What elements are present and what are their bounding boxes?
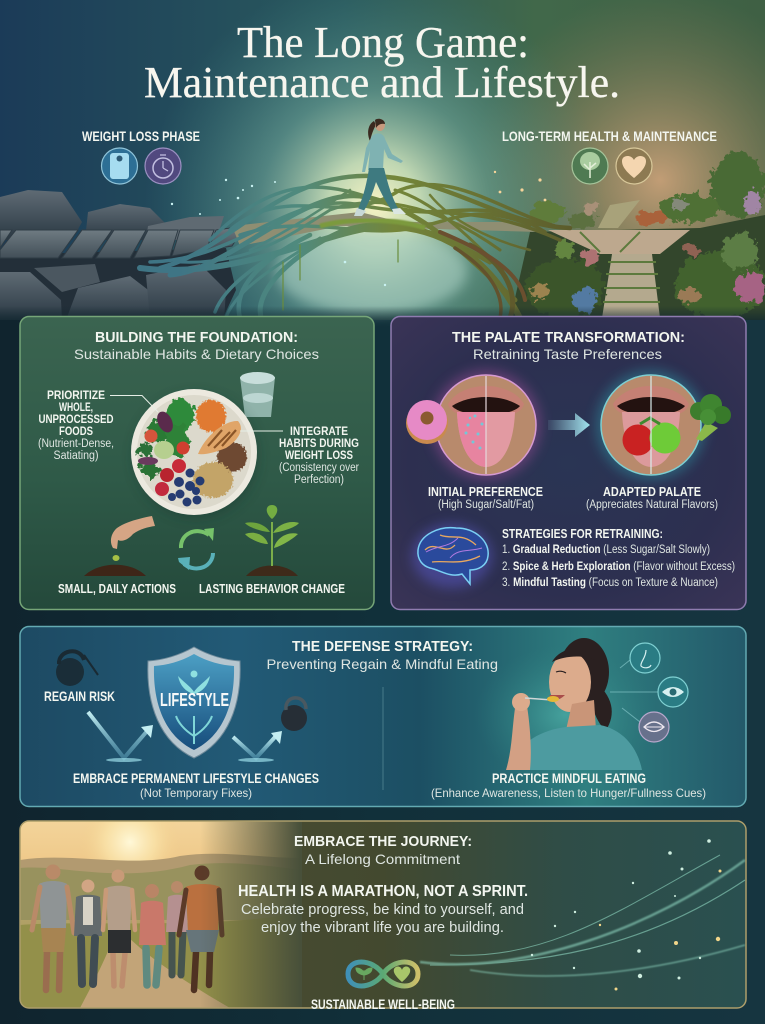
message: enjoy the vibrant life you are building. bbox=[261, 919, 504, 936]
heading bbox=[452, 330, 685, 362]
fade hero into dark background bbox=[0, 306, 765, 320]
icon: scale bbox=[102, 148, 138, 184]
left rocky cliff bbox=[0, 190, 245, 320]
stone walkway bbox=[0, 226, 245, 258]
icon: cycle arrows bbox=[178, 528, 214, 570]
person 6 bbox=[179, 866, 222, 990]
icon: lifestyle shield bbox=[148, 647, 240, 758]
lentils bbox=[217, 442, 247, 472]
caption: lasting behavior change: LASTING BEHAVIOR CHANGE bbox=[199, 581, 345, 596]
callout: integrate habits: INTEGRATE bbox=[290, 424, 348, 438]
carrots bbox=[196, 400, 226, 432]
icon: nose bbox=[630, 643, 660, 673]
icon: tree bbox=[572, 148, 608, 184]
heading bbox=[294, 833, 472, 867]
heading: Preventing Regain & Mindful Eating bbox=[266, 656, 498, 672]
label: long-term health with icons bbox=[502, 128, 717, 184]
divider bbox=[382, 687, 384, 790]
callout: integrate habits: HABITS DURING bbox=[279, 436, 359, 450]
decorative sparkles bbox=[531, 839, 722, 990]
label: long-term health with icons: LONG-TERM HEALTH & MAINTENANCE bbox=[502, 128, 717, 144]
berries bbox=[155, 459, 204, 506]
icon: infinity logo bbox=[348, 962, 418, 986]
moss strip bbox=[320, 220, 425, 228]
panel: embrace the journey bbox=[19, 820, 747, 1009]
text: strategies for retraining bbox=[502, 527, 735, 589]
title bbox=[144, 18, 620, 107]
callout: integrate habits: WEIGHT LOSS bbox=[285, 448, 353, 462]
icon: growing plant bbox=[245, 505, 299, 576]
callout: prioritize whole foods bbox=[38, 388, 158, 462]
caption: practice mindful eating: (Enhance Awareness, Listen to Hunger/Fullness Cues) bbox=[431, 786, 706, 800]
heading: A Lifelong Commitment bbox=[305, 851, 460, 867]
arrow bbox=[548, 413, 590, 437]
caption: permanent lifestyle changes: (Not Temporary Fixes) bbox=[140, 786, 252, 800]
text: strategies for retraining: 2. Spice & Herb Exploration (Flavor without Excess) bbox=[502, 561, 735, 573]
leafy greens bbox=[136, 399, 195, 477]
mouth: initial preference bbox=[431, 370, 541, 480]
border bbox=[20, 821, 746, 1008]
walking woman bbox=[354, 119, 406, 216]
sparkles bbox=[171, 171, 546, 286]
icon: lifestyle shield: LIFESTYLE bbox=[160, 690, 229, 710]
caption: initial preference: INITIAL PREFERENCE bbox=[428, 484, 543, 499]
callout: prioritize whole foods: (Nutrient-Dense, bbox=[38, 438, 114, 450]
caption: small daily actions: SMALL, DAILY ACTIONS bbox=[58, 581, 176, 596]
message: HEALTH IS A MARATHON, NOT A SPRINT. bbox=[238, 883, 528, 900]
callout: prioritize whole foods: WHOLE, bbox=[59, 400, 93, 414]
decorative light wave bbox=[420, 855, 745, 976]
person 3 bbox=[103, 870, 135, 986]
hero illustration: vine bridge from rocks to garden bbox=[0, 119, 765, 320]
icon: glowing brain bbox=[412, 524, 492, 588]
quinoa bbox=[193, 462, 233, 498]
callout: prioritize whole foods: UNPROCESSED bbox=[38, 412, 114, 426]
callout: prioritize whole foods: PRIORITIZE bbox=[47, 388, 105, 402]
icon: broccoli bbox=[690, 394, 731, 441]
icon: dark kettlebell bbox=[56, 651, 98, 686]
title: The Long Game: bbox=[237, 18, 529, 67]
person 4 bbox=[139, 884, 166, 985]
right garden terrain bbox=[510, 153, 765, 320]
icon: hand planting seed bbox=[84, 516, 155, 576]
icon: heart bbox=[616, 148, 652, 184]
message: Celebrate progress, be kind to yourself, and bbox=[241, 901, 524, 918]
callout: integrate habits: (Consistency over bbox=[279, 462, 359, 474]
panel: the defense strategy bbox=[20, 626, 746, 806]
woven vine arch bbox=[140, 176, 570, 320]
glass of water bbox=[240, 372, 275, 417]
heading bbox=[74, 330, 319, 362]
icon: lips bbox=[639, 712, 669, 742]
callout: prioritize whole foods: FOODS bbox=[59, 424, 93, 438]
caption: initial preference bbox=[428, 484, 543, 511]
label: weight loss phase with icons bbox=[82, 128, 200, 184]
glow under the arch bbox=[277, 230, 467, 314]
caption: adapted palate bbox=[586, 484, 718, 511]
caption: practice mindful eating: PRACTICE MINDFUL EATING bbox=[492, 771, 646, 786]
heading: Sustainable Habits & Dietary Choices bbox=[74, 346, 319, 362]
icon: donut bbox=[406, 400, 448, 444]
text: strategies for retraining: 1. Gradual Reduction (Less Sugar/Salt Slowly) bbox=[502, 544, 710, 556]
grilled chicken bbox=[198, 421, 241, 454]
icon: stopwatch bbox=[145, 148, 181, 184]
caption: practice mindful eating bbox=[431, 771, 706, 800]
panel: the palate transformation bbox=[391, 316, 746, 610]
icon: deflected kettlebell bbox=[281, 698, 307, 731]
heading: THE PALATE TRANSFORMATION: bbox=[452, 330, 685, 346]
label: weight loss phase with icons: WEIGHT LOSS PHASE bbox=[82, 128, 200, 144]
photo: friends walking at sunset bbox=[20, 822, 302, 1008]
icon: eye bbox=[658, 677, 688, 707]
illustration: woman eating mindfully bbox=[475, 638, 655, 785]
mouth: adapted palate bbox=[596, 370, 706, 480]
plate of whole foods bbox=[131, 389, 258, 518]
label: sustainable well-being: SUSTAINABLE WELL-BEING bbox=[311, 997, 455, 1012]
caption: adapted palate: (Appreciates Natural Flavors) bbox=[586, 499, 718, 511]
message bbox=[238, 883, 528, 936]
arrow: deflected left bbox=[88, 712, 153, 762]
caption: permanent lifestyle changes: EMBRACE PERMANENT LIFESTYLE CHANGES bbox=[73, 771, 319, 786]
person 5 bbox=[166, 881, 188, 975]
callout: prioritize whole foods: Satiating) bbox=[54, 450, 99, 462]
bridge deck bbox=[232, 212, 540, 246]
heading: EMBRACE THE JOURNEY: bbox=[294, 833, 472, 850]
person 1 bbox=[32, 864, 74, 990]
heading: BUILDING THE FOUNDATION: bbox=[95, 330, 298, 346]
caption: permanent lifestyle changes bbox=[73, 771, 319, 800]
heading bbox=[266, 638, 498, 672]
label: regain risk: REGAIN RISK bbox=[44, 688, 115, 704]
fade to dark bbox=[200, 821, 302, 1008]
person 2 bbox=[74, 880, 102, 984]
heading: THE DEFENSE STRATEGY: bbox=[292, 638, 473, 655]
heading: Retraining Taste Preferences bbox=[473, 346, 662, 362]
title: Maintenance and Lifestyle. bbox=[144, 58, 620, 107]
text: strategies for retraining: 3. Mindful Tasting (Focus on Texture & Nuance) bbox=[502, 577, 718, 589]
icons: senses bbox=[610, 643, 688, 742]
panel: building the foundation bbox=[20, 316, 374, 610]
caption: adapted palate: ADAPTED PALATE bbox=[603, 484, 701, 499]
arrow: deflected right bbox=[233, 731, 282, 762]
callout: integrate habits bbox=[240, 424, 359, 486]
text: strategies for retraining: STRATEGIES FOR RETRAINING: bbox=[502, 527, 663, 541]
caption: initial preference: (High Sugar/Salt/Fat) bbox=[438, 499, 534, 511]
callout: integrate habits: Perfection) bbox=[294, 474, 344, 486]
